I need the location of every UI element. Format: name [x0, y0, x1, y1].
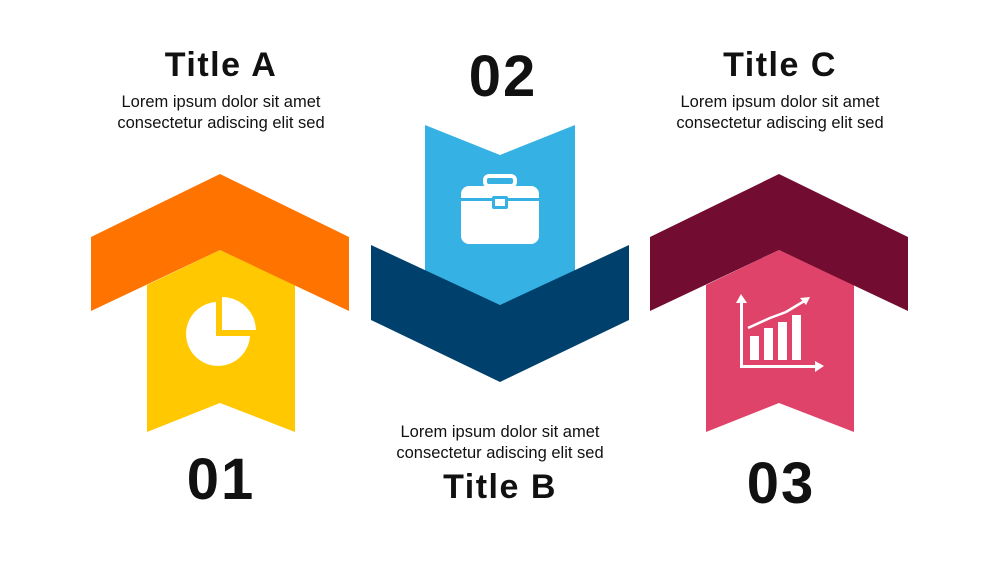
- title B: Title B: [443, 468, 557, 506]
- number 03: 03: [747, 451, 815, 516]
- panel C: pink ribbon: [706, 250, 854, 432]
- panel A: yellow ribbon: [147, 250, 295, 432]
- text A: consectetur adiscing elit sed: [117, 114, 325, 132]
- number 02: 02: [469, 44, 537, 109]
- arrow C: maroon chevron: [650, 174, 908, 311]
- text B: Lorem ipsum dolor sit amet: [400, 423, 600, 441]
- text C: consectetur adiscing elit sed: [676, 114, 884, 132]
- arrow A: orange chevron: [91, 174, 349, 311]
- text C: [676, 93, 884, 132]
- title C: Title C: [723, 46, 837, 84]
- icon: briefcase: [461, 176, 539, 244]
- icon: bar chart: [736, 294, 824, 372]
- arrow B: navy chevron: [371, 245, 629, 382]
- number 01: 01: [187, 447, 255, 512]
- text A: [117, 93, 325, 132]
- icon: pie chart: [186, 297, 256, 366]
- text C: Lorem ipsum dolor sit amet: [680, 93, 880, 111]
- panel B: light blue ribbon: [425, 125, 575, 305]
- text B: [396, 423, 604, 462]
- text A: Lorem ipsum dolor sit amet: [122, 93, 320, 111]
- text B: consectetur adiscing elit sed: [396, 444, 604, 462]
- title A: Title A: [165, 46, 277, 84]
